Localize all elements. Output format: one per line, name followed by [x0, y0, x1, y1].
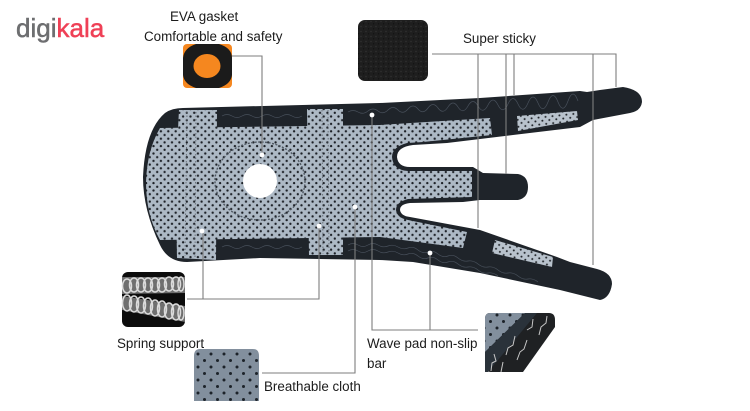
- anchor dots: [200, 113, 432, 255]
- leader lines: Super sticky: [432, 54, 616, 265]
- leader lines: Wave pad: [372, 115, 478, 330]
- heading: Spring support: Spring support: [117, 336, 204, 351]
- left vertical strap: [176, 110, 217, 260]
- brand logo: digikala: [16, 13, 105, 43]
- knee ring seam: [215, 142, 305, 220]
- heading: Comfortable and safety: Comfortable and safety: [144, 29, 283, 44]
- grey mesh corner: [485, 313, 525, 352]
- strap seams: [185, 110, 329, 258]
- heading: Wave pad non-slip bar: [367, 336, 477, 371]
- lower mesh strip: [492, 240, 553, 267]
- leader lines: Spring support: [187, 226, 319, 299]
- knee brace: [143, 87, 642, 300]
- icon: Super sticky swatch: [358, 20, 428, 81]
- heading: EVA gasket: EVA gasket: [170, 9, 239, 24]
- knee hole: [243, 164, 277, 198]
- icon: EVA gasket swatch: [183, 44, 232, 88]
- middle vertical strap: [307, 109, 343, 255]
- heading: Wave pad non-slip bar: bar: [367, 356, 387, 371]
- lower coil: [122, 295, 184, 320]
- icon: Spring support swatch: [122, 272, 185, 327]
- wave ridges: [491, 316, 547, 372]
- upper coil: [122, 277, 184, 293]
- leader line: EVA gasket: [232, 56, 262, 155]
- icon: Breathable cloth swatch: [194, 349, 259, 401]
- brace body: [143, 87, 642, 300]
- upper mesh strip: [517, 111, 578, 131]
- heading: Wave pad non-slip bar: Wave pad non-slip: [367, 336, 477, 351]
- icon: Wave pad swatch: [485, 313, 555, 372]
- heading: Super sticky: Super sticky: [463, 31, 536, 46]
- coil bands: [122, 277, 185, 322]
- blue band: [485, 313, 537, 372]
- breathable mesh panel: [146, 118, 492, 248]
- wave stitching: [222, 94, 578, 282]
- heading: Breathable cloth: Breathable cloth: [264, 379, 361, 394]
- leader line: Breathable cloth: [262, 207, 355, 373]
